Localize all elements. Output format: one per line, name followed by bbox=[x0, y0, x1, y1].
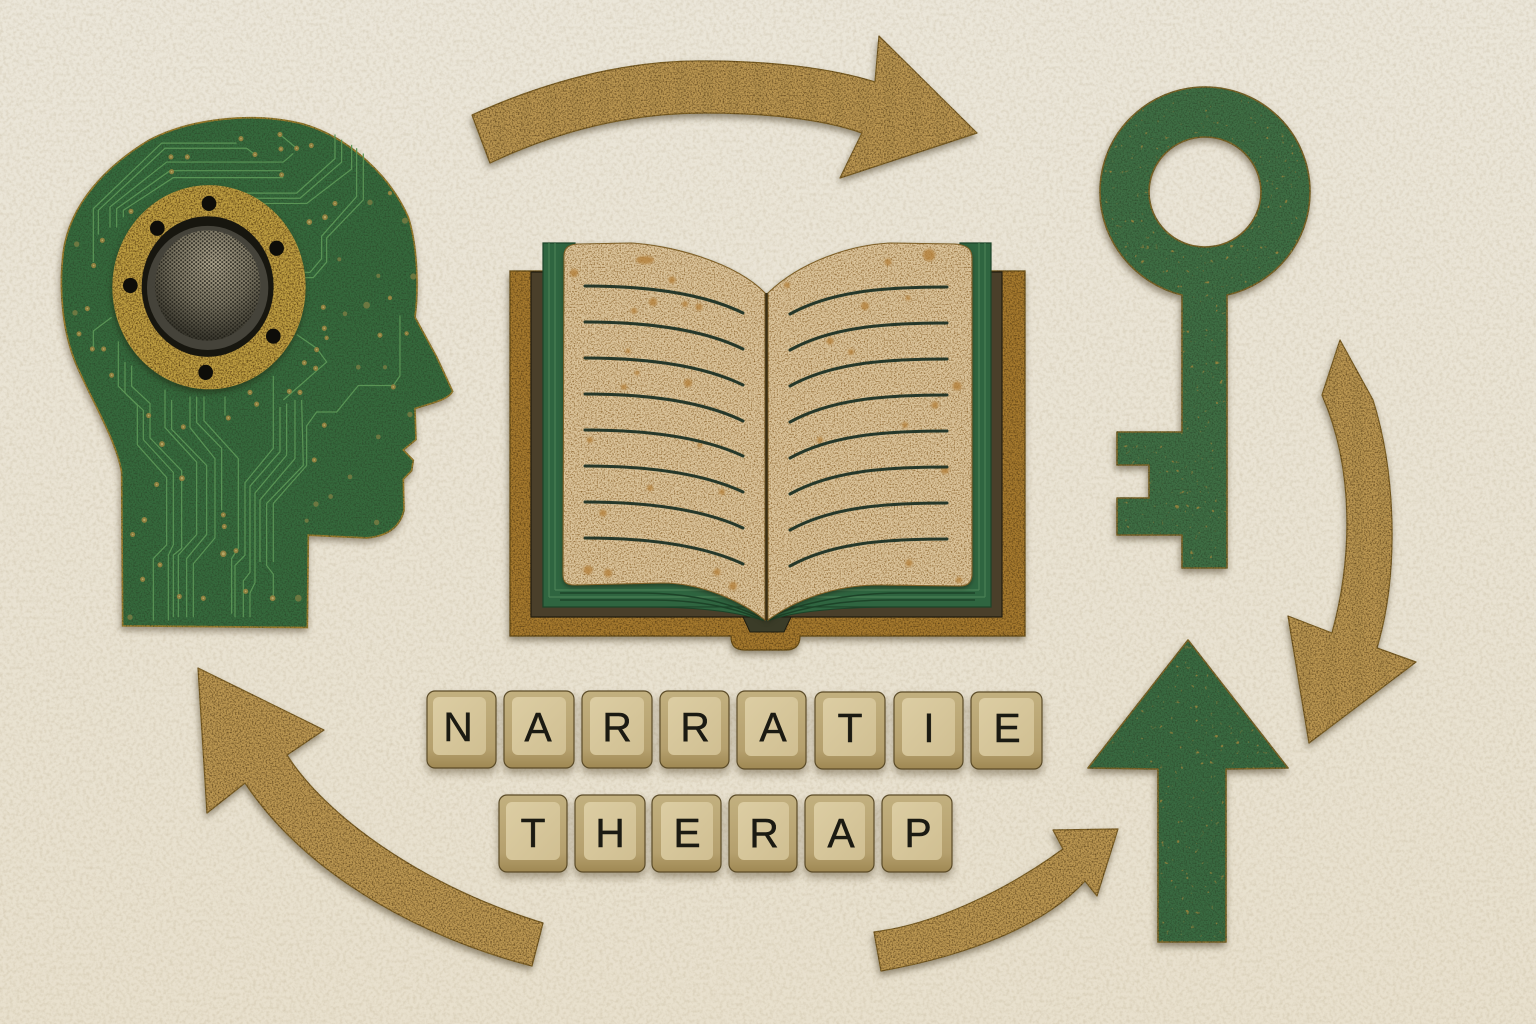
arrow: green upward arrow bbox=[1088, 640, 1288, 942]
keycaps: THERAP: H bbox=[595, 810, 625, 856]
keycaps: NARRATIE: N bbox=[443, 704, 473, 750]
keycaps: NARRATIE: E bbox=[993, 705, 1021, 751]
keycaps: NARRATIE: R bbox=[680, 704, 710, 750]
speaker: gold ring bbox=[112, 185, 306, 389]
keycaps: NARRATIE: A bbox=[759, 704, 787, 750]
keycaps: NARRATIE bbox=[427, 691, 1042, 769]
keycaps: THERAP: P bbox=[904, 810, 932, 856]
arrow: bottom-right curved cardboard arrow bbox=[874, 829, 1118, 971]
icon: green circuit-board head with speaker bbox=[61, 118, 453, 628]
solder pads bbox=[77, 133, 408, 600]
keycaps: THERAP bbox=[499, 795, 952, 872]
spine crease bbox=[765, 293, 768, 620]
keycaps: THERAP: A bbox=[827, 810, 855, 856]
left page bbox=[563, 243, 765, 620]
keycaps: NARRATIE: T bbox=[837, 705, 863, 751]
right page bbox=[768, 243, 972, 620]
head silhouette bbox=[61, 118, 453, 628]
back cover bbox=[510, 271, 1025, 650]
icon: open book bbox=[510, 243, 1025, 650]
gold speckles bbox=[72, 200, 416, 620]
keycaps: THERAP: T bbox=[520, 810, 546, 856]
left page text lines bbox=[585, 286, 743, 564]
circuit traces bbox=[93, 134, 400, 621]
keycaps: NARRATIE: A bbox=[524, 704, 552, 750]
arrow: right curved cardboard arrow bbox=[1288, 340, 1416, 743]
keycaps: THERAP: E bbox=[673, 810, 701, 856]
keycaps: NARRATIE: R bbox=[602, 704, 632, 750]
page stains bbox=[570, 249, 962, 590]
arrow: bottom-left curved cardboard arrow bbox=[198, 668, 543, 966]
arrow: top curved cardboard arrow bbox=[472, 36, 977, 178]
right page text lines bbox=[790, 287, 947, 566]
icon: green key bbox=[1100, 87, 1310, 568]
keycaps: NARRATIE: I bbox=[923, 705, 935, 751]
dark layer bbox=[531, 272, 1002, 617]
green layers bbox=[543, 243, 991, 607]
keycaps: THERAP: R bbox=[749, 810, 779, 856]
speaker holes bbox=[123, 196, 284, 380]
